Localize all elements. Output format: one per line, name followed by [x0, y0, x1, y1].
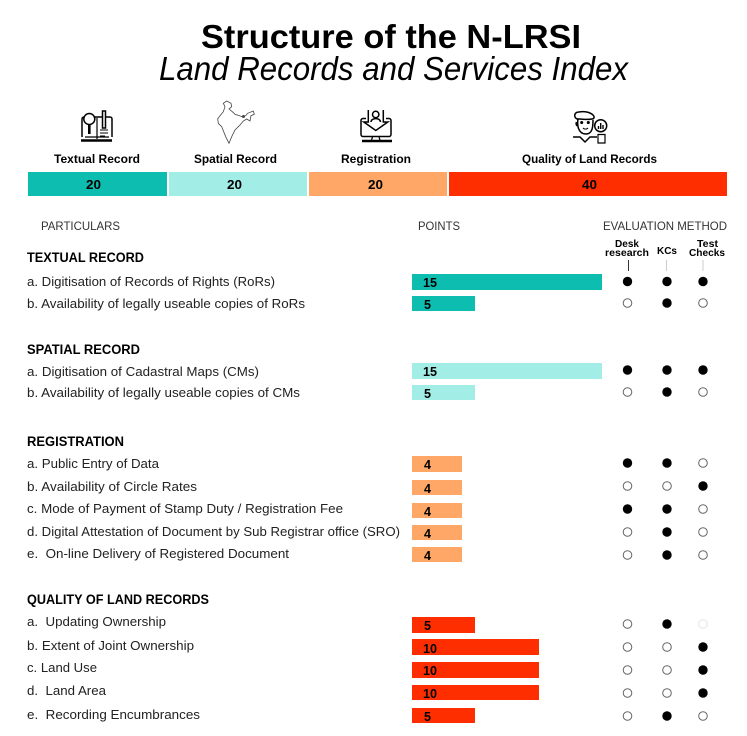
- panel: registration: 4: [424, 481, 432, 496]
- category labels: Textual Record: [54, 154, 140, 166]
- category labels: Spatial Record: [194, 154, 277, 166]
- panel: registration: 4: [424, 504, 432, 519]
- column headers: EVALUATION METHOD: [603, 219, 727, 233]
- panel: quality of land records: a. Updating Ownership: [27, 614, 166, 629]
- title: Structure of the N-LRSI: [201, 18, 581, 55]
- evaluation method sub-headers: Test: [697, 238, 719, 250]
- panel: quality of land records: e. Recording Encumbrances: [27, 707, 201, 722]
- panel: quality of land records: 5: [424, 709, 431, 724]
- title: [159, 18, 629, 87]
- panel: registration: [27, 434, 708, 563]
- panel: quality of land records: d. Land Area: [27, 683, 107, 698]
- icon: map of India: [218, 101, 254, 143]
- icon: book with magnifier and pen: [81, 111, 112, 140]
- panel: registration: e. On-line Delivery of Registered Document: [27, 546, 289, 561]
- panel: quality of land records: QUALITY OF LAND RECORDS: [27, 592, 209, 607]
- panel: textual record: b. Availability of legally useable copies of RoRs: [27, 296, 306, 311]
- panel: spatial record: [27, 342, 708, 401]
- panel: registration: b. Availability of Circle Rates: [27, 479, 198, 494]
- panel: quality of land records: [27, 592, 708, 724]
- panel: registration: REGISTRATION: [27, 434, 124, 449]
- evaluation method sub-headers: research: [605, 247, 649, 259]
- panel: textual record: 15: [423, 275, 437, 290]
- stacked score bar: 20: [86, 177, 101, 192]
- evaluation method sub-headers: Desk: [615, 238, 639, 250]
- panel: textual record: a. Digitisation of Records of Rights (RoRs): [27, 274, 275, 289]
- column headers: POINTS: [418, 219, 460, 233]
- stacked score bar: 20: [368, 177, 383, 192]
- panel: quality of land records: 5: [424, 618, 431, 633]
- panel: quality of land records: 10: [423, 641, 437, 656]
- stacked score bar: 20: [227, 177, 242, 192]
- panel: registration: 4: [424, 457, 432, 472]
- panel: quality of land records: c. Land Use: [27, 660, 97, 675]
- panel: registration: c. Mode of Payment of Stamp Duty / Registration Fee: [27, 501, 343, 516]
- panel: registration: d. Digital Attestation of Document by Sub Registrar office (SRO): [27, 524, 400, 539]
- panel: textual record: TEXTUAL RECORD: [27, 250, 144, 265]
- panel: textual record: 5: [424, 297, 431, 312]
- panel: spatial record: b. Availability of legally useable copies of CMs: [27, 385, 301, 400]
- stacked score bar: [28, 172, 727, 196]
- panel: spatial record: 5: [424, 386, 431, 401]
- panel: spatial record: SPATIAL RECORD: [27, 342, 140, 357]
- icon: computer with download arrow: [361, 110, 392, 141]
- panel: quality of land records: 10: [423, 663, 437, 678]
- panel: registration: 4: [424, 526, 432, 541]
- panel: registration: a. Public Entry of Data: [27, 456, 160, 471]
- panel: quality of land records: 10: [423, 686, 437, 701]
- category labels: Registration: [341, 154, 411, 166]
- panel: textual record: [27, 250, 708, 312]
- category labels: Quality of Land Records: [522, 154, 657, 166]
- panel: quality of land records: b. Extent of Joint Ownership: [27, 638, 194, 653]
- evaluation method sub-headers: Checks: [689, 247, 725, 259]
- evaluation method sub-headers: [605, 238, 725, 271]
- evaluation method sub-headers: KCs: [657, 245, 677, 257]
- panel: registration: 4: [424, 548, 432, 563]
- stacked score bar: 40: [582, 177, 597, 192]
- icon: person with magnifier: [573, 112, 607, 143]
- column headers: PARTICULARS: [41, 219, 120, 233]
- column headers: [41, 219, 727, 233]
- title: Land Records and Services Index: [159, 50, 629, 87]
- panel: spatial record: a. Digitisation of Cadastral Maps (CMs): [27, 364, 259, 379]
- category labels: [54, 154, 657, 166]
- panel: spatial record: 15: [423, 364, 437, 379]
